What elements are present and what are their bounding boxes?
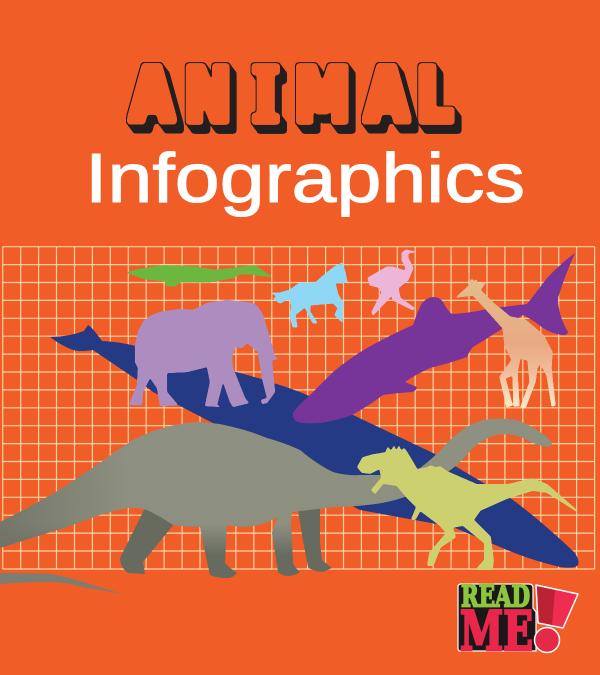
far hind leg <box>120 508 176 574</box>
word: READ: READ <box>461 580 530 614</box>
logo: Read Me! <box>458 580 578 663</box>
measurement grid <box>3 247 595 569</box>
silhouette: elephant <box>129 300 279 407</box>
title: ANIMAL: N <box>185 53 231 139</box>
title: Infographics: Infographics <box>85 139 525 217</box>
exclamation mark dot <box>534 628 560 652</box>
silhouette: giraffe <box>457 280 555 408</box>
title: ANIMAL: A <box>131 53 174 139</box>
silhouette: ostrich <box>368 250 415 315</box>
title: ANIMAL: I <box>253 53 279 139</box>
silhouette: blue whale <box>50 325 578 568</box>
silhouette: horse <box>272 263 347 327</box>
word: ME: ME <box>460 599 533 663</box>
silhouette: second dinosaur tail <box>0 573 123 594</box>
far front leg <box>298 505 332 572</box>
title: ANIMAL: M <box>295 53 350 139</box>
silhouette: long-necked dinosaur <box>0 419 552 578</box>
silhouette: whale shark <box>293 253 575 423</box>
exclamation mark shading <box>537 586 555 625</box>
logo backing <box>458 584 536 651</box>
silhouette: crocodile <box>127 266 272 286</box>
title: ANIMAL: A <box>365 53 409 139</box>
exclamation mark bar <box>536 585 578 628</box>
body, neck and near legs <box>0 419 552 578</box>
title: ANIMAL: L <box>417 53 452 139</box>
silhouette: theropod <box>358 447 577 569</box>
title: ANIMAL <box>131 53 452 139</box>
